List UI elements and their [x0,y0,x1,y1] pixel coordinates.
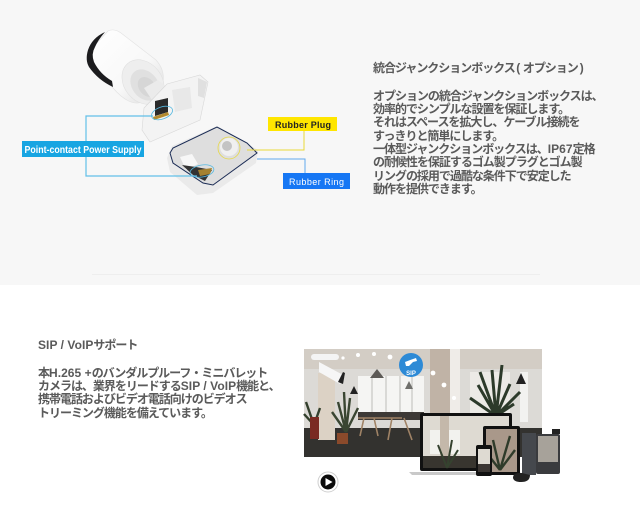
icon: video conference terminal [536,429,560,474]
icon: security camera [311,354,345,384]
icon: bullet camera [87,30,173,113]
text block: junction box description: 一体型ジャンクションボックスは、IP67定格 [373,142,595,156]
text block: SIP VoIP description: カメラは、業界をリードするSIP / VoIP機能と、 [38,379,280,393]
text block: junction box description: リングの採用で過酷な条件下で安定した [373,169,571,183]
photo: office interior [304,349,542,457]
icon: play button [318,472,338,492]
icon: mounting plate [142,75,208,142]
icon: tablet [483,426,520,475]
network dots [341,352,456,400]
callout line: rubber plug [247,131,304,150]
text block: SIP VoIP description [38,338,280,420]
text block: junction box description: の耐候性を保証するゴム製プラグとゴム製 [373,155,582,169]
label: Point-contact Power Supply [22,141,144,157]
icon: smartphone [476,445,492,476]
callout lines: power supply [86,116,197,176]
illustration: camera with junction box [22,30,350,195]
text block: SIP VoIP description: 本H.265 +のバンダルプルーフ・ミニバレット [38,366,267,380]
icon: laptop [409,413,515,475]
text block: junction box description: すっきりと簡単にします。 [373,129,503,143]
icon: SIP phone badge: SIP [406,371,416,377]
icon: SIP phone badge [399,353,423,377]
text block: junction box description: オプションの統合ジャンクションボックスは、 [373,89,603,103]
label: Point-contact Power Supply: Point-contact Power Supply [24,145,142,156]
heading: junction box: 統合ジャンクションボックス(オプション) [373,61,584,75]
label: Rubber Plug: Rubber Plug [275,120,331,130]
icon: desk video phone [513,433,536,482]
text block: junction box description: 効率的でシンプルな設置を保証します。 [373,102,569,116]
label: Rubber Ring: Rubber Ring [289,177,344,187]
text block: junction box description: それはスペースを拡大し、ケーブル接続を [373,115,579,129]
label: Rubber Plug [268,117,337,131]
callout line: rubber ring [257,159,305,173]
text block: junction box description: 動作を提供できます。 [373,182,482,196]
text block: SIP VoIP description: 携帯電話およびビデオ電話向けのビデオス [38,392,247,406]
heading: SIP / VoIP: SIP / VoIPサポート [38,338,137,352]
icon: junction box base [167,126,258,195]
text block: SIP VoIP description: トリーミング機能を備えています。 [38,406,212,420]
label: Rubber Ring [283,173,350,189]
text block: junction box description [373,61,603,196]
